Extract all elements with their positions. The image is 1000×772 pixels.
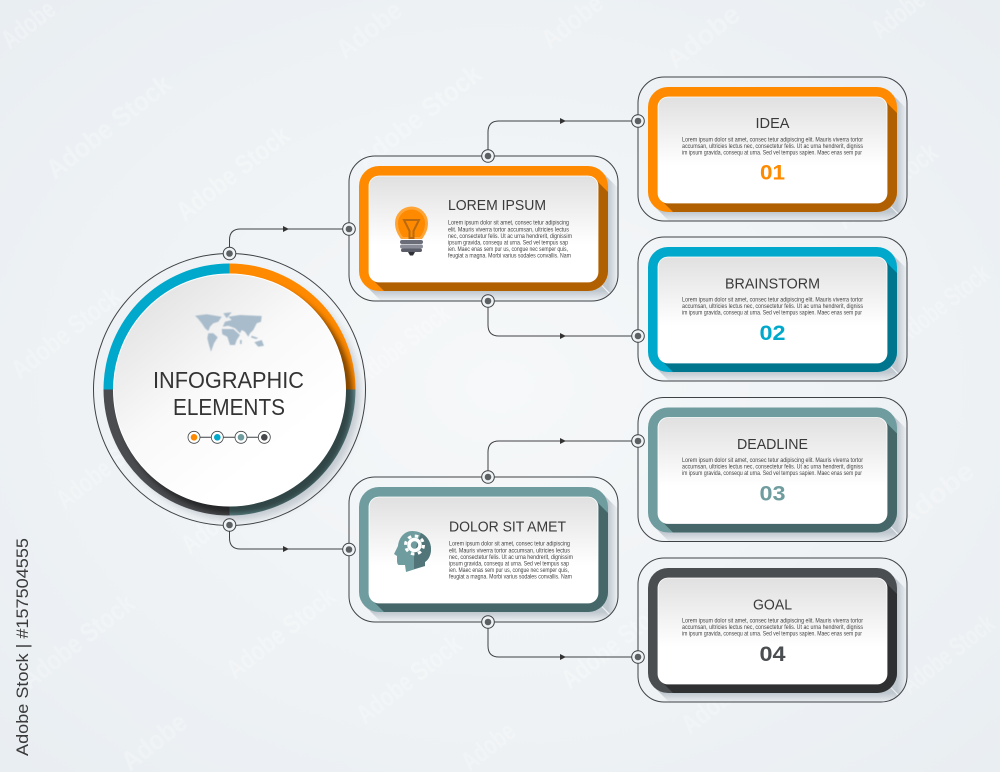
panel: deadline [638, 397, 908, 542]
watermark text: Adobe Stock [350, 629, 468, 730]
body text [682, 618, 864, 638]
body text: nec, consectetur felis. Ut ac urna hendrerit, dignissim [448, 233, 572, 240]
heading: DEADLINE [737, 436, 808, 453]
body text: im ipsum gravida, consequ at urna. Sed vel tempus sapien. Maec enas sem pur [682, 470, 863, 477]
connector: dolor sit amet to deadline [488, 438, 632, 471]
connector nodes [223, 115, 644, 663]
body text: accumsan, ultricies lectus nec, consectetur felis. Ut ac urna hendrerit, digniss [682, 464, 863, 470]
circle title [153, 367, 304, 420]
panel: goal [638, 558, 908, 702]
body text: im ipsum gravida, consequ at urna. Sed vel tempus sapien. Maec enas sem pur [682, 630, 863, 638]
heading: GOAL [753, 596, 792, 614]
icon: world map [195, 312, 264, 352]
number: 01 [760, 162, 785, 184]
number: 03 [760, 482, 786, 506]
watermark text: Adobe Stock [220, 581, 342, 685]
icon: light bulb [395, 206, 428, 256]
heading: IDEA [756, 115, 790, 132]
connector: dolor sit amet to goal [488, 628, 632, 660]
panel: idea [638, 76, 908, 222]
body text: accumsan, ultricies lectus nec, consectetur felis. Ut ac urna hendrerit, digniss [682, 303, 863, 310]
credit text: Adobe Stock | #157504555 [13, 538, 32, 756]
watermark text: Adobe Stock [675, 636, 797, 740]
watermark text: Adobe [890, 456, 980, 535]
ring segment: blue [104, 264, 230, 390]
body text: nec, consectetur felis. Ut ac urna hendrerit, dignissim [449, 554, 573, 561]
body text [448, 220, 572, 260]
watermark text: Adobe Stock [170, 119, 296, 227]
panel: dolor sit amet [348, 476, 618, 622]
body text: Lorem ipsum dolor sit amet, consec tetur adipiscing [448, 220, 569, 227]
body text: accumsan, ultricies lectus nec, consectetur felis. Ut ac urna hendrerit, digniss [682, 624, 863, 631]
body text: ien. Maec enas sem pur us, congue nec semper quis, [448, 246, 568, 253]
circle title: ELEMENTS [173, 394, 285, 420]
watermark text: Adobe [660, 0, 746, 75]
main circle [94, 254, 366, 526]
connector: circle to dolor sit amet [230, 531, 343, 552]
body text [682, 296, 864, 316]
ring segment: teal [230, 390, 356, 516]
watermark text: Adobe Stock [50, 417, 164, 515]
watermark text: Adobe Stock [40, 68, 178, 185]
white disc [114, 274, 346, 506]
body text: im ipsum gravida, consequ at urna. Sed vel tempus sapien. Maec enas sem pur [682, 310, 863, 316]
icon: head with gear [394, 531, 431, 572]
circle title: INFOGRAPHIC [153, 367, 304, 393]
body text: Lorem ipsum dolor sit amet, consec tetur adipiscing elit. Mauris viverra tortor [682, 136, 864, 144]
colour key dots [188, 431, 270, 443]
body text: im ipsum gravida, consequ at urna. Sed vel tempus sapien. Maec enas sem pur [682, 150, 863, 156]
watermark text: Adobe Stock [830, 137, 944, 235]
heading: BRAINSTORM [725, 276, 820, 292]
connector: circle to lorem ipsum [230, 226, 343, 247]
watermark text: Adobe Stock [15, 587, 141, 695]
watermark text: Adobe Stock [350, 298, 456, 390]
heading: LOREM IPSUM [448, 197, 546, 214]
watermark text: Adobe Stock [5, 281, 127, 385]
body text: Lorem ipsum dolor sit amet, consec tetur adipiscing [449, 541, 570, 548]
connector: lorem ipsum to idea [488, 118, 632, 150]
watermark text: Adobe Stock [175, 459, 293, 560]
body text: Lorem ipsum dolor sit amet, consec tetur adipiscing elit. Mauris viverra tortor [682, 296, 864, 304]
panel: brainstorm [638, 236, 908, 382]
ring segment: dark [104, 390, 230, 516]
body text: ien. Maec enas sem pur us, congue nec semper quis, [449, 567, 569, 574]
body text: ipsum gravida, consequ at urna. Sed vel tempus sap [449, 560, 569, 568]
heading: DOLOR SIT AMET [449, 518, 566, 536]
ring segment: orange [230, 264, 356, 390]
body text [449, 541, 573, 581]
body text: feugiat a magna. Morbi varius sodales convallis. Nam [448, 253, 571, 260]
connector: lorem ipsum to brainstorm [488, 307, 632, 339]
body text [682, 136, 864, 156]
body text: Lorem ipsum dolor sit amet, consec tetur adipiscing elit. Mauris viverra tortor [682, 457, 864, 464]
body text: accumsan, ultricies lectus nec, consectetur felis. Ut ac urna hendrerit, digniss [682, 143, 863, 150]
body text: elit. Mauris viverra tortor accumsan, ultricies lectus [448, 226, 569, 233]
panel: lorem ipsum [348, 156, 618, 302]
number: 04 [760, 643, 786, 666]
body text: elit. Mauris viverra tortor accumsan, ultricies lectus [449, 547, 570, 554]
body text [682, 457, 864, 477]
body text: ipsum gravida, consequ at urna. Sed vel tempus sap [448, 240, 568, 246]
watermark text: Adobe Stock [350, 58, 488, 175]
watermark text: Adobe Stock [555, 591, 677, 695]
body text: Lorem ipsum dolor sit amet, consec tetur adipiscing elit. Mauris viverra tortor [682, 618, 864, 624]
number: 02 [760, 322, 786, 345]
body text: feugiat a magna. Morbi varius sodales convallis. Nam [449, 574, 572, 581]
